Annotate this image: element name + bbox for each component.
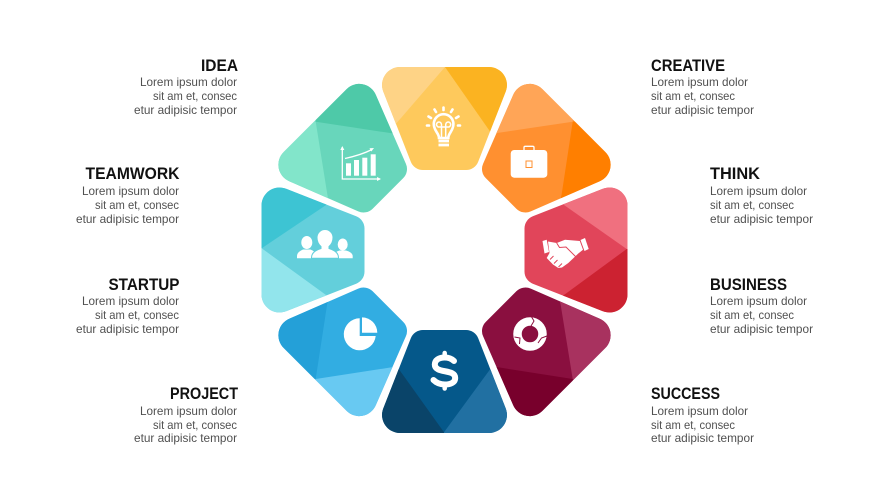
description: business: sit am et, consec (710, 308, 794, 322)
segment: idea (yellow) (382, 67, 507, 170)
description: project (134, 404, 237, 445)
label: business (710, 276, 813, 336)
description: project: etur adipisic tempor (134, 431, 237, 445)
label: business: BUSINESS (710, 276, 787, 294)
description: teamwork (76, 184, 179, 226)
label: success: SUCCESS (651, 385, 720, 403)
icon: handshake (542, 238, 589, 268)
label: success (651, 385, 754, 445)
icon: team of people (297, 230, 353, 258)
description: think: etur adipisic tempor (710, 212, 813, 226)
description: success: sit am et, consec (651, 418, 735, 432)
description: creative: etur adipisic tempor (651, 103, 754, 117)
description: success: Lorem ipsum dolor (651, 404, 748, 418)
description: project: sit am et, consec (153, 418, 237, 432)
description: teamwork: sit am et, consec (95, 198, 179, 212)
segment: startup (teal) (262, 188, 364, 312)
label: project (134, 385, 238, 445)
segment: project (blue) (278, 288, 407, 416)
icon: growth chart (340, 146, 381, 181)
description: startup (76, 294, 179, 336)
description: success (651, 404, 754, 445)
segment: think (red) (524, 188, 628, 312)
segment: teamwork (green) (278, 84, 407, 212)
description: teamwork: Lorem ipsum dolor (82, 184, 179, 198)
description: idea: Lorem ipsum dolor (140, 75, 237, 89)
label: teamwork (76, 165, 180, 226)
label: startup: STARTUP (108, 276, 180, 294)
label: creative: CREATIVE (651, 57, 725, 75)
description: idea: etur adipisic tempor (134, 103, 237, 117)
description: business: etur adipisic tempor (710, 322, 813, 336)
label: think (710, 165, 813, 226)
description: startup: etur adipisic tempor (76, 322, 179, 336)
segment: creative (orange) (482, 84, 611, 212)
description: think: Lorem ipsum dolor (710, 184, 807, 198)
label: project: PROJECT (170, 385, 238, 403)
description: project: Lorem ipsum dolor (140, 404, 237, 418)
description: teamwork: etur adipisic tempor (76, 212, 179, 226)
description: success: etur adipisic tempor (651, 431, 754, 445)
label: startup (76, 276, 180, 336)
icon: dollar sign (434, 353, 455, 388)
description: startup: Lorem ipsum dolor (82, 294, 179, 308)
label: creative (651, 57, 754, 117)
label: idea: IDEA (201, 57, 238, 75)
label: think: THINK (710, 165, 760, 183)
description: creative (651, 75, 754, 117)
icon: cycle arrows (514, 316, 547, 346)
description: business (710, 294, 813, 336)
description: business: Lorem ipsum dolor (710, 294, 807, 308)
description: creative: sit am et, consec (651, 89, 735, 103)
segment: dollar (navy) (382, 330, 507, 433)
icon: pie chart (344, 317, 377, 350)
description: startup: sit am et, consec (95, 308, 179, 322)
label: idea (134, 57, 238, 117)
description: think (710, 184, 813, 226)
description: think: sit am et, consec (710, 198, 794, 212)
icon: light bulb (427, 108, 460, 145)
label: teamwork: TEAMWORK (86, 165, 180, 183)
icon: briefcase (511, 146, 547, 178)
segment: business (maroon) (482, 288, 611, 416)
description: creative: Lorem ipsum dolor (651, 75, 748, 89)
description: idea (134, 75, 237, 117)
description: idea: sit am et, consec (153, 89, 237, 103)
